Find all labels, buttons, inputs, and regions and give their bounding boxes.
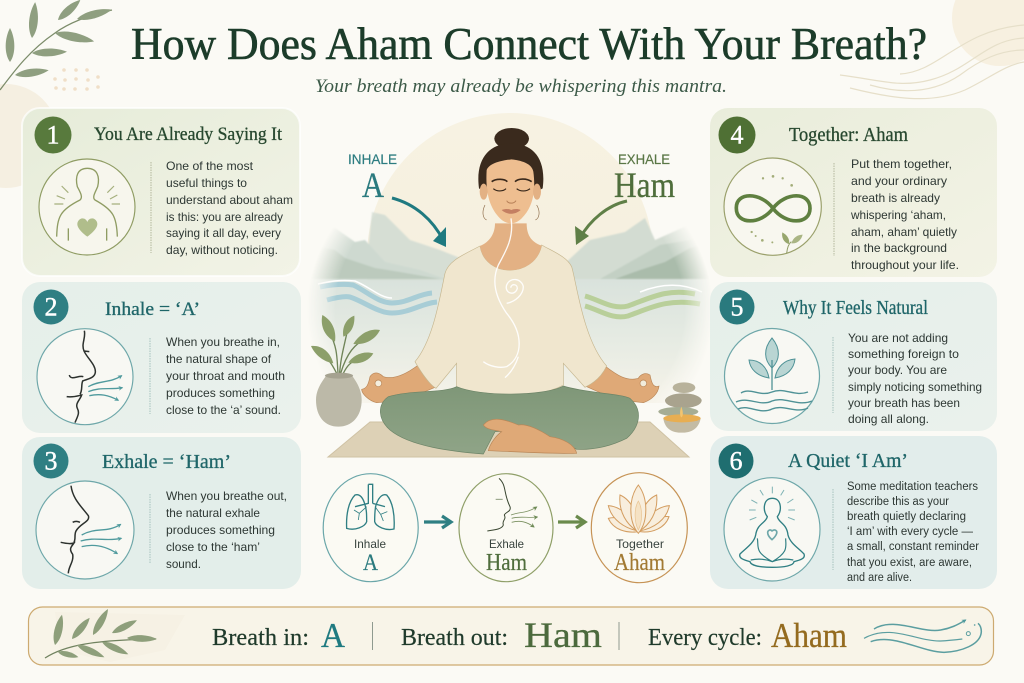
icon: inhale face profile (37, 329, 133, 425)
legs (380, 386, 638, 454)
heading 4: Together: Aham (789, 125, 908, 146)
icon: infinity with sprout (724, 158, 821, 255)
face (480, 159, 541, 223)
label: exhale Ham with arrow: EXHALE (618, 151, 670, 167)
body text 6: ‘I am’ with every cycle — (847, 526, 973, 538)
text: breath out: Breath out: (401, 625, 508, 651)
badge 6 (718, 444, 754, 478)
badge 1: 1 (46, 120, 60, 150)
arrow: inhale to exhale (424, 516, 451, 528)
panel: 6 A Quiet I Am (710, 436, 997, 589)
decoration: top left leafy branch (0, 0, 113, 90)
body text 4: and your ordinary (851, 174, 947, 188)
body text 4: throughout your life. (851, 258, 959, 272)
body text 2: produces something (166, 386, 275, 400)
flow: together circle (591, 473, 687, 583)
decoration: pale leaf wash (55, 612, 185, 662)
body text 3: sound. (166, 557, 201, 571)
badge 1 (34, 116, 72, 154)
arrow: exhale to together (558, 516, 585, 528)
panel: 2 Inhale (22, 282, 301, 433)
body text 5: doing all along. (848, 412, 929, 426)
feet (483, 419, 577, 453)
body text 4: breath is already (851, 191, 940, 205)
decoration: dots (53, 68, 100, 91)
summary strip: Aham (771, 616, 847, 655)
badge 2: 2 (44, 292, 58, 322)
body text 5 (848, 331, 982, 426)
body text 2: your throat and mouth (166, 369, 285, 383)
badge 4: 4 (730, 120, 744, 150)
icon: profile with breath (487, 478, 537, 531)
body text 6: Some meditation teachers (847, 481, 978, 493)
decoration: top left beige blob (0, 84, 58, 188)
summary strip: A (321, 616, 346, 655)
body text 5: simply noticing something (848, 380, 982, 394)
badge 2 (34, 290, 68, 324)
arms (362, 365, 659, 403)
title: How Does Aham Connect With Your Breath? (131, 19, 927, 69)
illustration: meditating woman scene (300, 113, 720, 457)
body text 5: You are not adding (848, 331, 948, 345)
icon: lotus (608, 485, 669, 533)
body text 3: produces something (166, 523, 275, 537)
body text 1: useful things to (166, 176, 247, 190)
body text 1: day, without noticing. (166, 243, 278, 257)
heading 2: Inhale = ‘A’ (105, 299, 200, 320)
badge 3 (34, 444, 68, 478)
sun circle (367, 113, 653, 399)
icon: meditating figure (724, 478, 820, 581)
body text 6: that you exist, are aware, (847, 557, 972, 569)
body text 5: your breath has been (848, 396, 960, 410)
body text 3: close to the ‘ham’ (166, 540, 260, 554)
shirt (415, 245, 607, 397)
heading 1: You Are Already Saying It (94, 125, 283, 145)
body text 1: is this: you are already (166, 210, 283, 224)
divider (832, 489, 834, 570)
decoration: top right blob and waves (840, 0, 1024, 99)
panel: 1 You Are Already Saying It (22, 108, 300, 276)
divider (150, 162, 152, 253)
plant in vase (311, 315, 380, 427)
badge 4 (718, 116, 756, 154)
heading 6: A Quiet ‘I Am’ (788, 451, 908, 472)
flow: exhale circle: Exhale (489, 537, 524, 551)
body text 1: One of the most (166, 159, 254, 173)
label: inhale A with arrow: A (362, 165, 384, 205)
body text 1 (166, 159, 293, 257)
body text 6: a small, constant reminder (847, 541, 979, 553)
neck (480, 223, 542, 270)
divider (149, 494, 151, 563)
body text 5: something foreign to (848, 347, 959, 361)
badge 5 (720, 290, 754, 324)
stones and candle (658, 382, 702, 433)
heading 3: Exhale = ‘Ham’ (102, 452, 231, 473)
flow: exhale circle (459, 474, 553, 582)
flow: exhale circle: Ham (486, 550, 527, 576)
body text 2 (166, 335, 285, 417)
body text 6: breath quietly declaring (847, 511, 966, 523)
divider (149, 338, 151, 414)
body text 4: whispering ‘aham, (850, 208, 946, 222)
body text 2: close to the ‘a’ sound. (166, 403, 281, 417)
divider (833, 163, 835, 256)
hair back and bun (478, 128, 543, 193)
flow: inhale circle: A (363, 550, 378, 575)
body text 4: aham, aham’ quietly (851, 225, 957, 239)
body text 6 (847, 481, 979, 584)
label: inhale A with arrow: INHALE (348, 151, 397, 167)
heading 5: Why It Feels Natural (783, 298, 929, 319)
body text 2: When you breathe in, (166, 335, 280, 349)
badge 3: 3 (44, 446, 58, 476)
flow: together circle: Aham (614, 550, 665, 576)
panel: 3 Exhale (22, 437, 301, 589)
body text 3 (166, 489, 287, 571)
label: inhale A with arrow (348, 151, 446, 247)
body text 4: in the background (851, 241, 947, 255)
icon: breath waves (864, 620, 981, 652)
subtitle: Your breath may already be whispering this mantra. (315, 76, 727, 97)
icon: lungs (347, 484, 394, 529)
panel: 5 Why It Feels Natural (710, 282, 997, 431)
flow: inhale circle: Inhale (354, 537, 386, 551)
body text 1: understand about aham (166, 193, 293, 207)
body text 6: and are alive. (847, 572, 912, 584)
label: exhale Ham with arrow: Ham (614, 165, 675, 205)
body text 1: saying it all day, every (166, 226, 281, 240)
body text 3: When you breathe out, (166, 489, 287, 503)
icon: exhale face profile (36, 481, 134, 579)
icon: leaf branch (45, 607, 157, 660)
icon: body with heart (39, 159, 135, 255)
icon: sprout on water (724, 328, 820, 424)
flow: together circle: Together (616, 537, 664, 551)
summary strip: Ham (524, 615, 602, 655)
label: exhale Ham with arrow (575, 151, 675, 245)
body text 2: the natural shape of (166, 352, 272, 366)
body text 4 (850, 157, 959, 272)
body text 3: the natural exhale (166, 506, 260, 520)
body text 4: Put them together, (851, 157, 952, 171)
landscape: mountains and lake (300, 212, 720, 403)
panel: 4 Together Aham (710, 108, 997, 277)
white breath line and spiral (483, 218, 523, 378)
summary strip (28, 607, 994, 665)
text: breath in: Breath in: (212, 625, 309, 651)
mat (328, 422, 689, 457)
divider (832, 337, 834, 413)
badge 5: 5 (730, 292, 744, 322)
badge 6: 6 (730, 446, 742, 476)
body text 5: your body. You are (848, 363, 947, 377)
body text 6: describe this as your (847, 496, 949, 508)
text: every cycle: Every cycle: (648, 625, 762, 651)
flow: inhale circle (323, 474, 418, 582)
